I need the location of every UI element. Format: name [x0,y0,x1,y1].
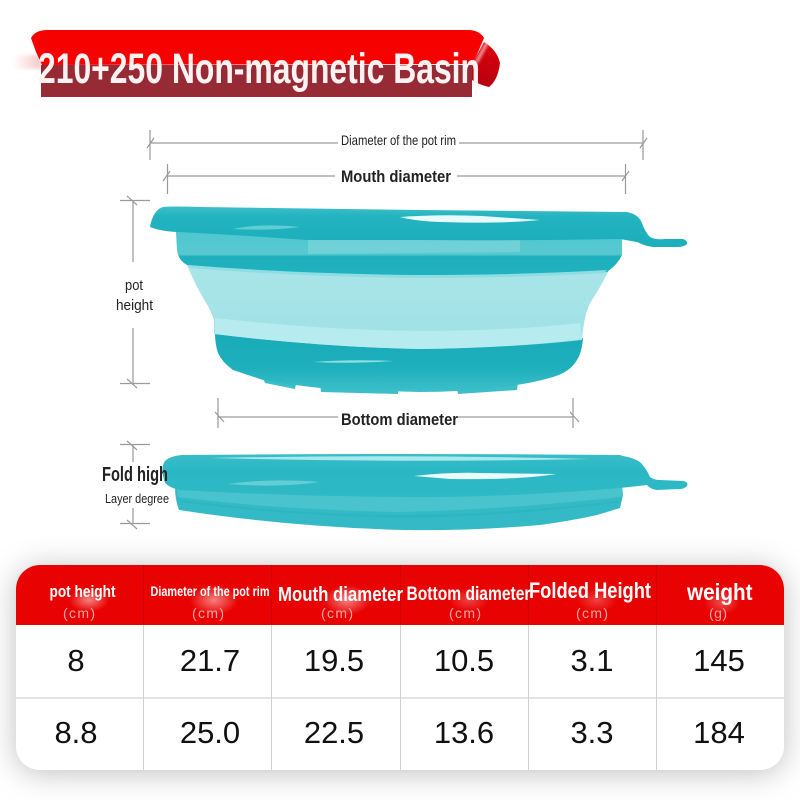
label: layer degree: Layer degree [105,491,169,506]
dimension: mouth diameter [163,164,629,194]
table column headings: Bottom diameter [406,584,531,605]
dimension: pot height: height [116,297,154,314]
table row 2: 22.5 [304,715,364,750]
table units: (cm) [576,605,608,621]
dimension: bottom diameter: Bottom diameter [341,410,458,429]
table units [63,605,727,621]
basin upper band [176,232,622,276]
table column headings: Diameter of the pot rim [150,583,270,599]
dimension: bottom diameter [215,398,579,429]
table units: (cm) [321,605,353,621]
table row 2: 8.8 [54,715,98,750]
table units: (cm) [192,605,224,621]
dimension: pot height [116,196,154,388]
fold rim highlight [414,473,556,479]
table row 2 [54,715,745,750]
title banner [13,30,500,97]
specification table [16,565,784,770]
basin collapsible wall [187,265,610,349]
table row 2: 184 [693,715,745,750]
dimension: pot height: pot [125,277,144,294]
table units: (g) [709,605,727,621]
dimension: pot rim diameter: Diameter of the pot rim [341,132,456,148]
label: fold high: Fold high [102,464,168,486]
rim highlight [400,215,540,223]
table column headings: pot height [50,582,116,601]
table card [16,565,784,770]
table units: (cm) [63,605,95,621]
table row 1: 21.7 [180,643,240,678]
dimension: pot rim diameter [147,130,647,160]
dimension: fold height [102,441,169,529]
basin feet [263,378,518,394]
table row 2: 3.3 [570,715,614,750]
title text: 210+250 Non-magnetic Basin [38,45,480,93]
table column headings: weight [686,579,753,605]
basin rim [150,206,687,247]
table row 1: 19.5 [304,643,364,678]
table row 1: 3.1 [570,643,614,678]
table row 2: 25.0 [180,715,240,750]
table row 2: 13.6 [434,715,494,750]
table row 1: 145 [693,643,745,678]
table column headings [50,578,753,606]
table column headings: Folded Height [529,578,652,603]
illustration: folded basin [162,454,688,530]
basin lower section [215,333,583,392]
illustration: open basin [150,206,687,394]
table row 1 [67,643,745,678]
table row 1: 8 [67,643,85,678]
table units: (cm) [449,605,481,621]
table row 1: 10.5 [434,643,494,678]
table header band [16,565,784,625]
dimension: mouth diameter: Mouth diameter [341,167,451,186]
table column headings: Mouth diameter [278,584,403,606]
